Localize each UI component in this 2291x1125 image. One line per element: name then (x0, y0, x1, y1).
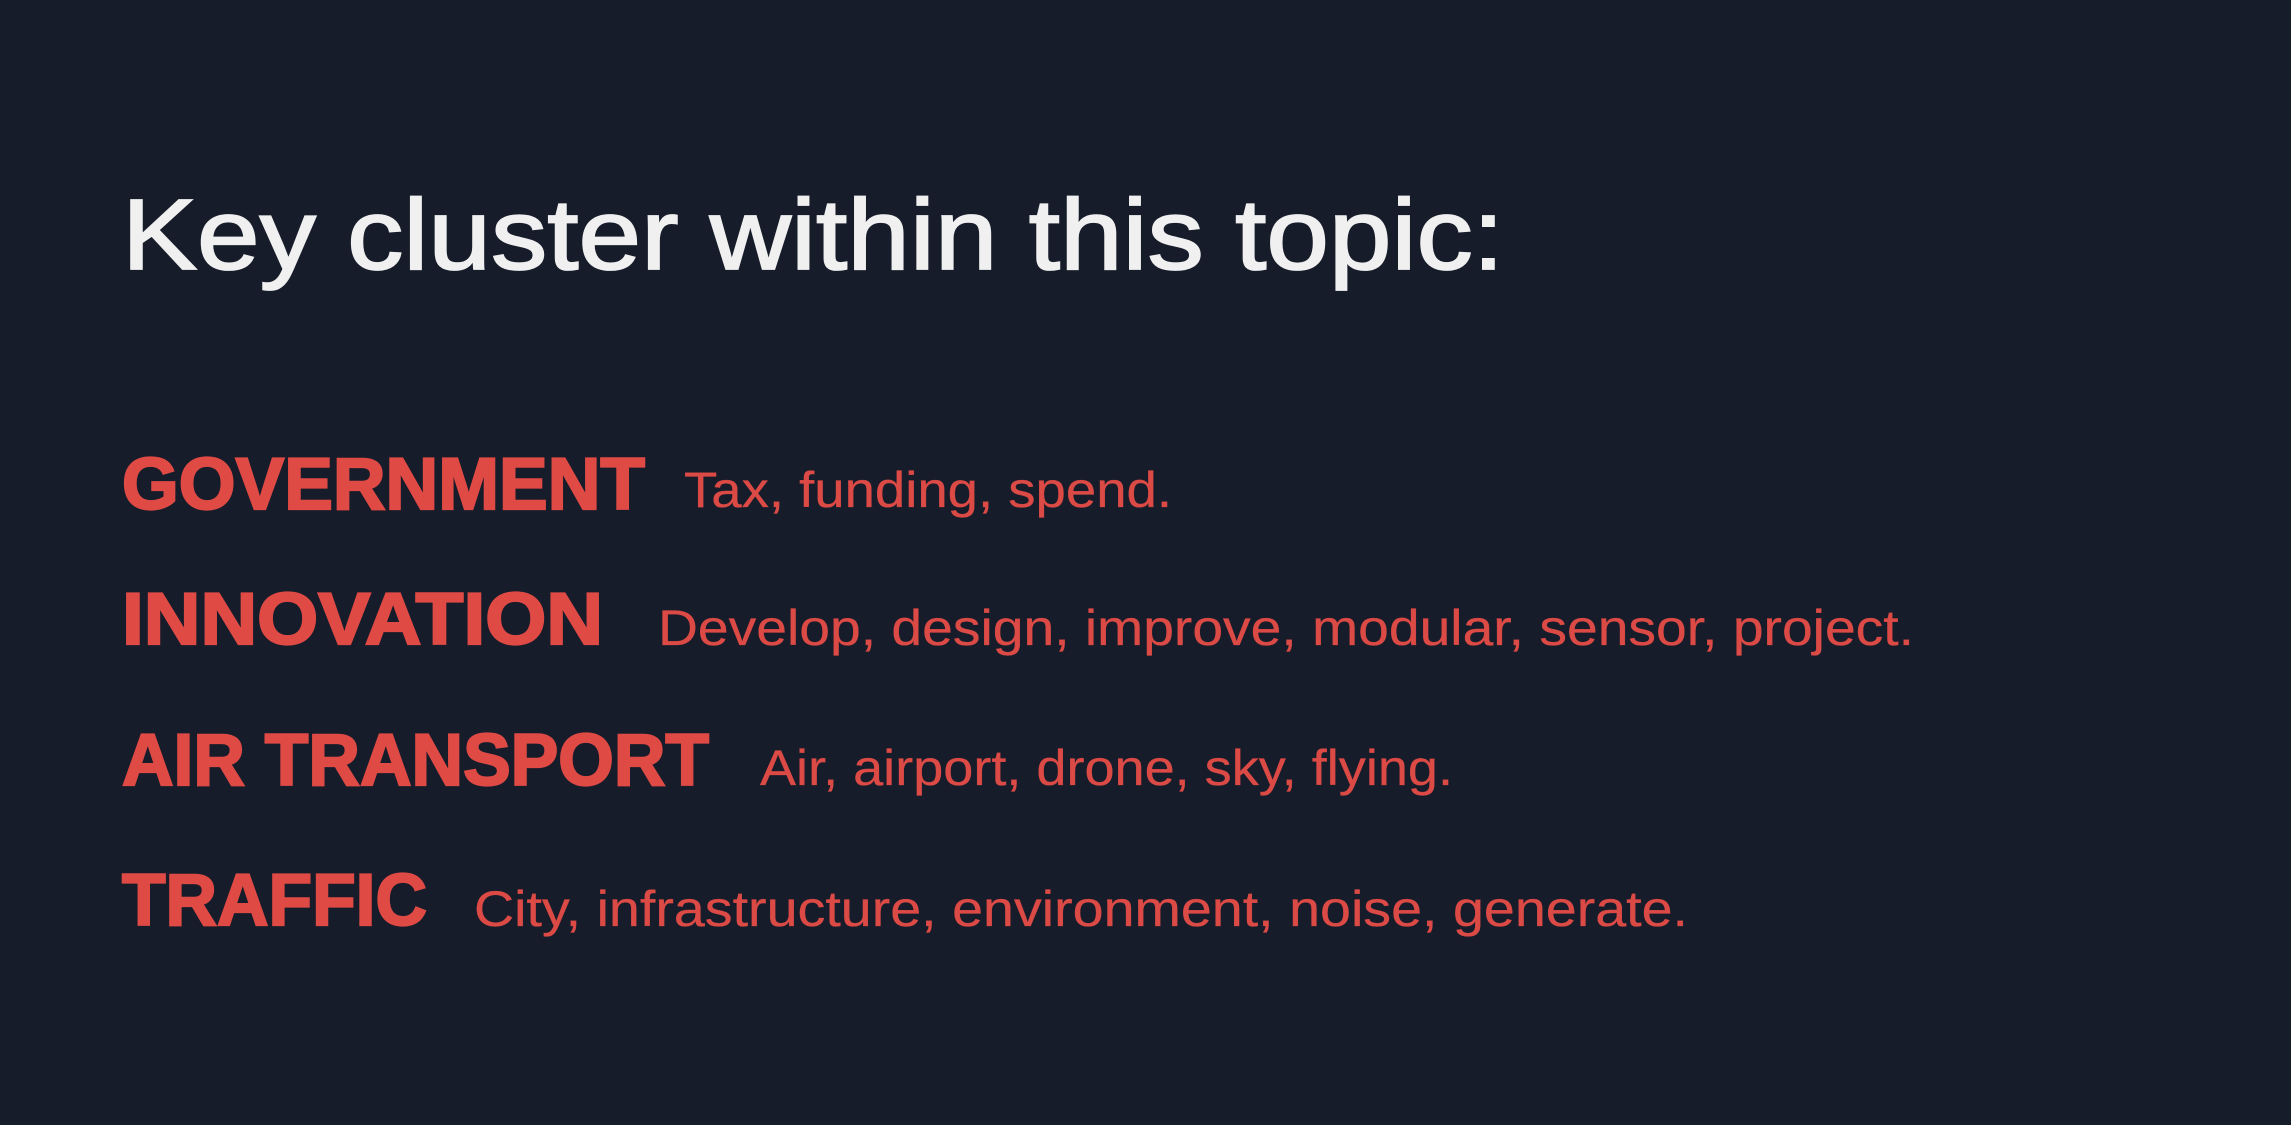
heading: government: GOVERNMENT (122, 444, 645, 525)
heading: air transport: AIR TRANSPORT (122, 720, 709, 801)
keywords: air transport: Air, airport, drone, sky, flying. (760, 740, 1453, 796)
keywords: traffic: City, infrastructure, environment, noise, generate. (474, 881, 1688, 937)
cluster row: government (122, 444, 1172, 525)
heading: traffic: TRAFFIC (122, 860, 427, 941)
title: Key cluster within this topic: (122, 179, 1504, 291)
heading: innovation: INNOVATION (122, 579, 603, 660)
cluster row: innovation (122, 579, 1914, 660)
cluster row: traffic (122, 860, 1688, 941)
keywords: government: Tax, funding, spend. (684, 462, 1172, 518)
cluster row: air transport (122, 720, 1453, 801)
keywords: innovation: Develop, design, improve, modular, sensor, project. (658, 600, 1914, 656)
